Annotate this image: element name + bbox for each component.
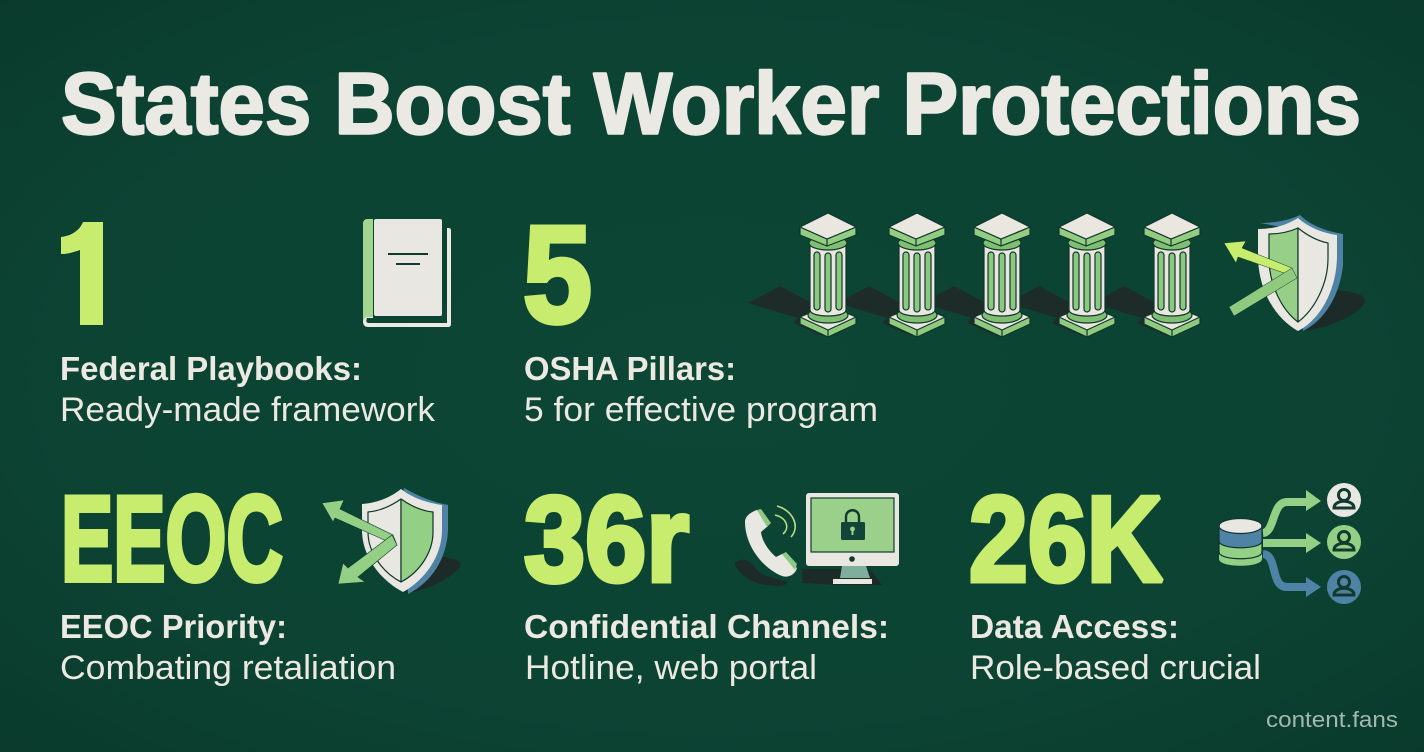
- panel: osha pillars: [523, 198, 1365, 429]
- stat: 26K: 26K: [969, 471, 1163, 607]
- icon: shield with deflected arrow: [1224, 215, 1365, 331]
- description: role-based crucial: Role-based crucial: [970, 649, 1261, 687]
- label: osha pillars: OSHA Pillars:: [524, 350, 736, 387]
- panel: eeoc priority: [60, 470, 461, 687]
- watermark: content.fans: [1266, 707, 1398, 732]
- label: federal playbooks: Federal Playbooks:: [60, 350, 362, 387]
- icon: phone and secure monitor: [735, 493, 899, 586]
- icon: shield with two arrows: [322, 488, 461, 594]
- stat: 1: [61, 222, 103, 325]
- panel: federal playbooks: [61, 219, 451, 428]
- panel: confidential channels: [524, 471, 899, 687]
- stat: 1: 1: [53, 194, 126, 354]
- description: 5 for effective program: 5 for effective program: [524, 391, 878, 429]
- stat: EEOC: EEOC: [61, 470, 283, 606]
- icon: five pillars: [748, 213, 1200, 337]
- panel: data access: [969, 471, 1361, 687]
- label: eeoc priority: EEOC Priority:: [60, 608, 287, 645]
- title: States Boost Worker Protections: [61, 56, 1361, 152]
- label: data access: Data Access:: [970, 608, 1179, 645]
- icon: book: [363, 219, 451, 327]
- description: combating retaliation: Combating retaliation: [60, 649, 396, 687]
- stat: 36r: 36r: [524, 471, 689, 607]
- description: ready-made framework: Ready-made framework: [60, 391, 436, 429]
- icon: database routing to users: [1219, 483, 1361, 604]
- description: hotline, web portal: Hotline, web portal: [525, 649, 817, 687]
- label: confidential channels: Confidential Channels:: [524, 608, 889, 645]
- stat: 5: 5: [523, 198, 592, 352]
